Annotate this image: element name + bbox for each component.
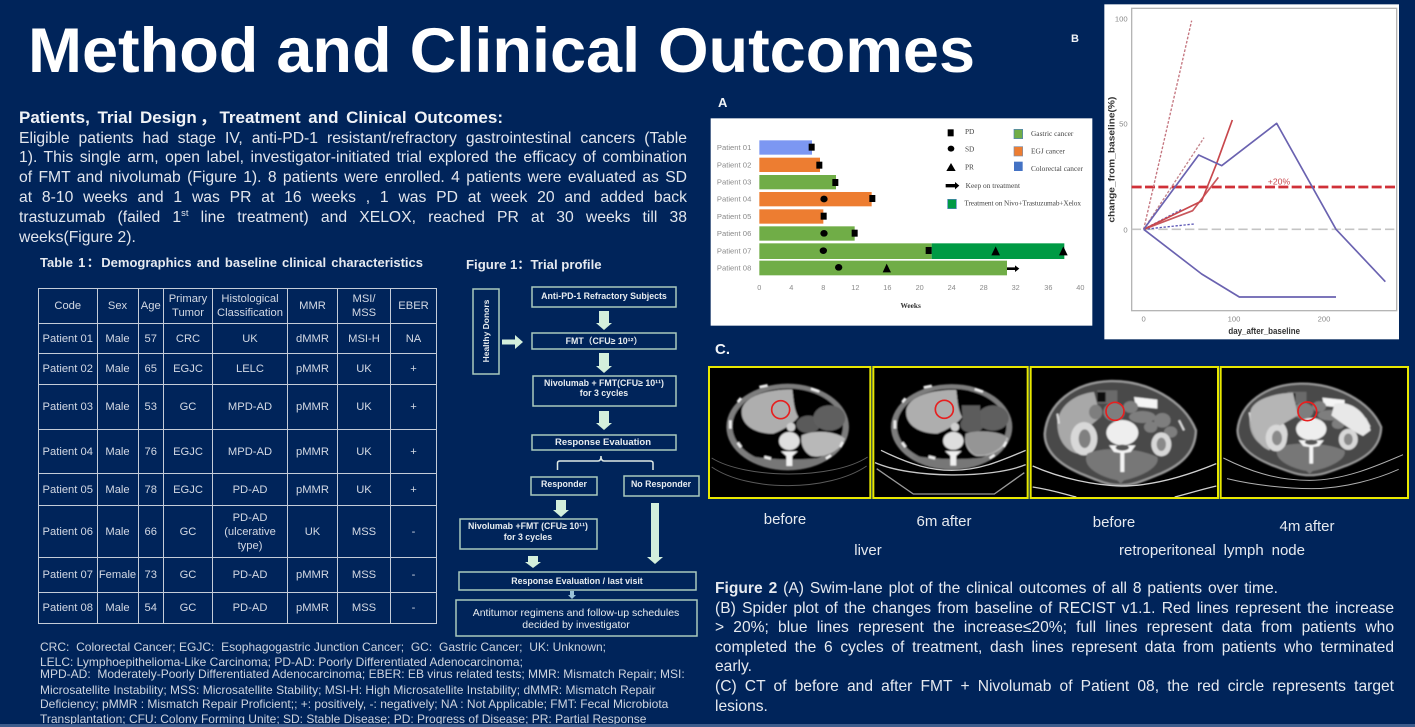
table: demographics: dMMR [296, 332, 329, 344]
week axis: 0 [757, 283, 761, 292]
CT captions: 6m after [916, 513, 972, 530]
flowchart labels: for 3 cycles [580, 388, 628, 398]
week axis: 32 [1012, 283, 1020, 292]
table: demographics: Male [105, 401, 130, 413]
patient labels: Patient 07 [717, 246, 751, 255]
week axis [757, 283, 1084, 310]
box: nivolumab second course [460, 519, 597, 549]
axis labels: 200 [1318, 315, 1330, 324]
table: demographics: Male [105, 484, 130, 496]
figure 2 caption: Figure 2 (A) Swim-lane plot of the clinical outcomes of all 8 patients over time. [715, 580, 1278, 597]
box: no responder [624, 476, 699, 496]
table: demographics: Patient 04 [43, 446, 93, 458]
table: demographics [38, 288, 437, 624]
week axis: 20 [916, 283, 924, 292]
legend: Treatment on Nivo+Trastuzumab+Xelox [964, 198, 1081, 207]
legend [946, 127, 1084, 209]
patient labels: Patient 06 [717, 229, 751, 238]
table: demographics: + [410, 446, 417, 458]
patient labels: Patient 01 [717, 143, 751, 152]
figure 2 caption: (C) CT of before and after FMT + Nivolumab of Patient 08, the red circle represents target [715, 678, 1394, 695]
body paragraph: trastuzumab (failed 1st line treatment) and XELOX, reached PR at 30 weeks till 38 [19, 207, 687, 226]
patient labels: Patient 04 [717, 195, 752, 204]
table: demographics: 78 [145, 484, 157, 496]
table: demographics: + [410, 363, 417, 375]
table: demographics: pMMR [296, 569, 329, 581]
table: demographics: + [410, 484, 417, 496]
table: demographics: UK [356, 446, 372, 458]
flowchart labels: Anti-PD-1 Refractory Subjects [541, 291, 667, 301]
body paragraph: weeks(Figure 2). [19, 229, 136, 246]
table: demographics: (ulcerative [224, 526, 276, 538]
week axis: 16 [883, 283, 891, 292]
table: demographics: 76 [145, 446, 157, 458]
table: demographics: 66 [145, 526, 157, 538]
table: demographics: UK [242, 332, 258, 344]
threshold lines [1132, 187, 1397, 229]
table: demographics: Male [105, 332, 130, 344]
box: refractory subjects [532, 287, 676, 307]
CT: liver 6 months after [873, 367, 1028, 498]
body paragraph: Eligible patients had stage IV, anti-PD-1 resistant/refractory gastrointestinal cancers (Table [19, 130, 687, 147]
flowchart labels: for 3 cycles [504, 532, 552, 542]
abbreviations footnote: LELC: Lymphoepithelioma-Like Carcinoma; PD-AD: Poorly Differentiated Adenocarcinoma; [40, 655, 523, 669]
title: Method and Clinical Outcomes [28, 16, 975, 86]
table: demographics: 65 [145, 363, 157, 375]
table: demographics: - [412, 569, 415, 581]
figure 1 heading: Figure 1：Trial profile [466, 257, 602, 272]
body paragraph: of FMT and nivolumab (Figure 1). 8 patients were enrolled. 4 patients were evaluated as SD [19, 169, 687, 186]
body paragraph: 1). This single arm, open label, investigator-initiated trial explored the efficacy of combination [19, 149, 687, 166]
table: demographics: UK [356, 484, 372, 496]
axis labels: 50 [1119, 120, 1128, 129]
abbreviations footnote: Deficiency; pMMR : Mismatch Repair Proficient;; +: positively, -: negatively; NA : Not Applicable; FMT: Fecal Microbiota [40, 697, 668, 711]
table: demographics: pMMR [296, 602, 329, 614]
table: demographics: CRC [176, 332, 200, 344]
box: responder [531, 477, 597, 495]
table: demographics: GC [180, 401, 196, 413]
panel label A: A [718, 95, 727, 110]
body paragraph [19, 130, 687, 246]
box: response evaluation [532, 435, 676, 450]
week axis: 36 [1044, 283, 1052, 292]
week axis: 8 [821, 283, 825, 292]
week axis: 12 [851, 283, 859, 292]
table: demographics: MSS [352, 569, 376, 581]
axis labels [1107, 15, 1330, 336]
table: demographics: Male [105, 602, 130, 614]
panel: patients and trial design text [19, 108, 687, 246]
table: demographics: GC [180, 602, 196, 614]
bracket split [558, 456, 653, 470]
legend: Keep on treatment [966, 181, 1020, 190]
flow arrows [502, 311, 663, 599]
table: demographics: EGJC [173, 363, 203, 375]
CT: liver before [709, 367, 870, 498]
figure 2 caption: (B) Spider plot of the changes from baseline of RECIST v1.1. Red lines represent the increase [715, 600, 1394, 617]
table: demographics: MSS [352, 602, 376, 614]
legend: PD [965, 127, 974, 136]
table: demographics: pMMR [296, 484, 329, 496]
axis labels: 100 [1115, 15, 1128, 24]
CT: lymph node 4 months after [1221, 367, 1408, 498]
table: demographics: Patient 06 [43, 526, 93, 538]
table: demographics: 53 [145, 401, 157, 413]
bottom edge strip [0, 724, 1415, 727]
box: FMT [532, 333, 676, 349]
box: last visit evaluation [459, 572, 696, 590]
table: demographics: - [412, 602, 415, 614]
abbreviations footnote: CRC: Colorectal Cancer; EGJC: Esophagogastric Junction Cancer; GC: Gastric Cancer; UK: Unknown; [40, 640, 606, 654]
flowchart labels: No Responder [631, 479, 692, 489]
abbreviations footnote: Transplantation; CFU: Colony Forming Unite; SD: Stable Disease; PD: Progress of Disease; PR: Partial Response [40, 712, 646, 726]
table heading: Table 1：Demographics and baseline clinical characteristics [40, 255, 423, 270]
table: demographics: GC [180, 526, 196, 538]
axis labels: 0 [1142, 315, 1146, 324]
flowchart labels: Response Evaluation [555, 437, 651, 448]
legend: Colorectal cancer [1031, 164, 1084, 173]
flowchart labels: FMT（CFU≥ 10¹²） [566, 336, 642, 346]
table: demographics: Code [54, 300, 81, 312]
outcome markers [809, 144, 1068, 272]
patient labels: Patient 05 [717, 212, 751, 221]
table: demographics: MSS [352, 526, 376, 538]
table: demographics: NA [406, 332, 421, 344]
week axis: 4 [789, 283, 793, 292]
week axis: 40 [1076, 283, 1084, 292]
abbreviations footnote [40, 640, 685, 726]
CT captions: before [764, 511, 806, 528]
CT captions: liver [854, 542, 882, 559]
table: demographics: GC [180, 569, 196, 581]
table: demographics: PD-AD [233, 484, 267, 496]
table: demographics: LELC [236, 363, 264, 375]
figure 2 caption: completed the 6 cycles of treatment, dash lines represent data from patients who terminated [715, 639, 1394, 656]
table: demographics: EBER [398, 300, 429, 312]
table: demographics: PD-AD [233, 569, 267, 581]
axis labels: day_after_baseline [1228, 326, 1300, 336]
flowchart labels: Healthy Donors [481, 299, 491, 362]
panel label B: B [1071, 33, 1079, 45]
patient labels: Patient 02 [717, 160, 751, 169]
table: demographics: Histological [221, 293, 279, 305]
table: demographics: Primary [169, 293, 207, 305]
table: demographics: UK [356, 363, 372, 375]
table: demographics: Classification [217, 307, 283, 319]
table: demographics: Age [141, 300, 161, 312]
box: healthy donors [473, 289, 499, 374]
body paragraph: at 8-10 weeks and 1 was PR at 16 weeks , 1 was PD at week 20 and added back [19, 189, 687, 206]
table: demographics: Patient 01 [43, 332, 93, 344]
flowchart labels: Responder [541, 479, 588, 489]
table: demographics: MPD-AD [228, 446, 272, 458]
abbreviations footnote: MPD-AD: Moderately-Poorly Differentiated Adenocarcinoma; EBER: EB virus related tests; MMR: Mismatch Repair; MSI: [40, 667, 685, 681]
table: demographics: type) [238, 540, 262, 552]
abbreviations footnote: Microsatellite Instability; MSS: Microsatellite Stability; MSI-H: High Microsatellite Instability; dMMR: Mismatch Repair [40, 683, 656, 697]
table: demographics: Male [105, 526, 130, 538]
table: demographics: Sex [108, 300, 127, 312]
flowchart labels: Antitumor regimens and follow-up schedules [473, 607, 679, 619]
flowchart labels: decided by investigator [522, 619, 630, 631]
axis labels: 100 [1228, 315, 1240, 324]
CT captions: retroperitoneal lymph node [1119, 542, 1305, 559]
legend: PR [965, 162, 974, 171]
table: demographics: 73 [145, 569, 157, 581]
table: demographics: MSI/ [352, 293, 376, 305]
table: demographics: MPD-AD [228, 401, 272, 413]
panel label C: C. [715, 341, 730, 358]
week axis: 28 [980, 283, 988, 292]
figure 2 caption: > 20%; blue lines represent the increase≤20%; full lines represent data from patients who [715, 619, 1394, 636]
CT captions [764, 511, 1335, 559]
table: demographics: - [412, 526, 415, 538]
axis labels: 0 [1123, 225, 1128, 234]
figure 2 caption: early. [715, 658, 752, 675]
table: demographics: PD-AD [233, 602, 267, 614]
table: demographics: Male [105, 363, 130, 375]
figure 2 caption: lesions. [715, 698, 768, 715]
legend: SD [965, 144, 974, 153]
patient labels: Patient 08 [717, 263, 751, 272]
table: demographics: MMR [299, 300, 326, 312]
flowchart labels: Response Evaluation / last visit [511, 576, 643, 586]
table: demographics: 57 [145, 332, 157, 344]
axis labels: change_from_baseline(%) [1107, 97, 1117, 223]
legend: EGJ cancer [1031, 146, 1066, 155]
table: demographics: PD-AD [233, 512, 267, 524]
table: demographics: MSS [352, 307, 376, 319]
table: demographics: Patient 03 [43, 401, 93, 413]
table: demographics: pMMR [296, 446, 329, 458]
table: demographics: Male [105, 446, 130, 458]
patient labels [717, 143, 752, 272]
table: demographics: Patient 07 [43, 569, 93, 581]
table: demographics: Patient 02 [43, 363, 93, 375]
table: demographics: pMMR [296, 363, 329, 375]
table: demographics: Patient 05 [43, 484, 93, 496]
patient labels: Patient 03 [717, 178, 751, 187]
CT captions: before [1093, 514, 1135, 531]
table: demographics: UK [305, 526, 320, 538]
table: demographics: Tumor [172, 307, 204, 319]
CT captions: 4m after [1279, 518, 1335, 535]
table: demographics: pMMR [296, 401, 329, 413]
table: demographics: + [410, 401, 417, 413]
flowchart labels: Nivolumab + FMT(CFU≥ 10¹¹) [544, 378, 664, 388]
box: nivolumab plus FMT [533, 376, 676, 406]
table: demographics: Patient 08 [43, 602, 93, 614]
patient bars [759, 140, 1064, 275]
table: demographics: MSI-H [348, 332, 380, 344]
box: antitumor regimens [456, 600, 697, 636]
flowchart labels [468, 291, 692, 631]
table: demographics: EGJC [173, 446, 203, 458]
table: demographics: Female [99, 569, 136, 581]
CT: lymph node before [1031, 367, 1218, 498]
legend: Gastric cancer [1031, 129, 1074, 138]
threshold label: +20% [1268, 176, 1290, 186]
flowchart labels: Nivolumab +FMT (CFU≥ 10¹¹) [468, 521, 588, 531]
figure 2 caption [715, 580, 1394, 715]
table: demographics: 54 [145, 602, 157, 614]
table: demographics: UK [356, 401, 372, 413]
table: demographics: EGJC [173, 484, 203, 496]
section heading: Patients, Trial Design，Treatment and Clinical Outcomes: [19, 108, 503, 127]
patient lines [1144, 21, 1385, 297]
week axis: 24 [948, 283, 956, 292]
week axis: Weeks [900, 301, 921, 310]
